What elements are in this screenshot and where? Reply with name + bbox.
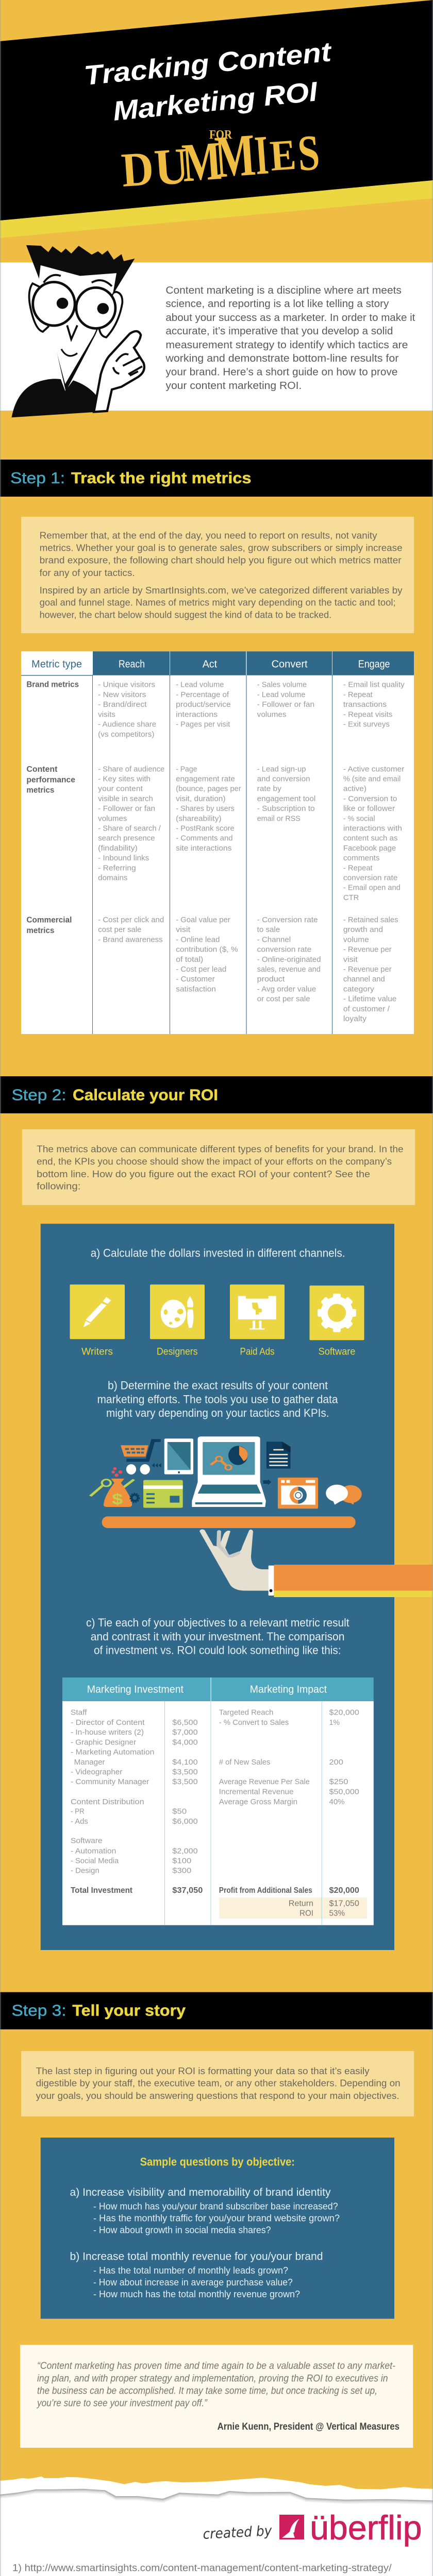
engage column: content such as [343, 834, 397, 843]
act column: site interactions [176, 844, 231, 853]
reach column: your content [98, 785, 143, 793]
channel icons [70, 1284, 364, 1357]
reach column: - Follower or fan [98, 804, 155, 813]
reach column: - Cost per click and [98, 916, 164, 924]
objective b: - How about increase in average purchase value? [93, 2277, 293, 2287]
row labels: metrics [26, 926, 54, 935]
intro text: science, and reporting is a lot like telling a story [165, 298, 389, 310]
act column: engagement rate [176, 775, 235, 783]
objective a: - Has the monthly traffic for you/your brand website grown? [93, 2213, 340, 2223]
investment amounts: $4,100 [172, 1758, 198, 1767]
quote text: you’re sure to see your investment pay off.” [36, 2398, 208, 2409]
objective b: b) Increase total monthly revenue for you/your brand [70, 2250, 323, 2262]
convert column: - Sales volume [257, 681, 307, 689]
text: part c: c) Tie each of your objectives to a relevant metric result [86, 1616, 349, 1629]
engage column: - Retained sales [343, 916, 398, 924]
small gear [130, 1493, 139, 1502]
torn white edge [0, 2477, 433, 2514]
panel: sample questions [41, 2138, 394, 2319]
convert column: email or RSS [257, 814, 301, 823]
engage column: channel and [343, 975, 385, 984]
step 3 paragraph: digestible by your staff, the executive team, or any other stakeholders. Depending on [36, 2078, 401, 2089]
row labels: Commercial [26, 916, 72, 924]
convert column: - Follower or fan [257, 700, 314, 709]
investment items: - PR [71, 1807, 85, 1816]
panel: intro [0, 245, 433, 417]
engage column: % (site and email [343, 775, 401, 783]
reach column [98, 681, 164, 944]
panel: step 2 text [22, 1129, 415, 1205]
table header row: Reach [119, 659, 145, 670]
step 2 bar [0, 1076, 433, 1113]
reach column: - Key sites with [98, 775, 151, 783]
icon: paid ads: Paid Ads [240, 1346, 274, 1357]
reach column: - Brand awareness [98, 935, 163, 944]
table header row: Metric type [31, 659, 82, 670]
impact values [329, 1708, 359, 1918]
objective b [70, 2250, 323, 2299]
step 2 paragraph [37, 1144, 404, 1192]
investment items: - Director of Content [71, 1718, 145, 1727]
text: part c: and contrast it with your investment. The comparison [91, 1630, 344, 1643]
investment items: - Marketing Automation [71, 1748, 154, 1757]
impact items [219, 1708, 313, 1918]
engage column: - Exit surveys [343, 720, 390, 729]
text: part b: b) Determine the exact results of your content [108, 1379, 328, 1392]
engage column: interactions with [343, 824, 402, 833]
step 2 title: Calculate your ROI [73, 1086, 218, 1104]
table header row: Act [203, 659, 218, 670]
panel: step 3 text [21, 2051, 414, 2116]
convert column: and conversion [257, 775, 310, 783]
step 2 label: Step 2: [11, 1086, 66, 1104]
step 3 paragraph: The last step in figuring out your ROI is formatting your data so that it’s easily [36, 2066, 370, 2076]
heading: step 2 [0, 1076, 433, 1113]
quote box [20, 2345, 413, 2448]
impact values: 40% [329, 1798, 344, 1806]
pale box [21, 517, 414, 633]
impact items: Return [289, 1899, 313, 1908]
convert column: or cost per sale [257, 995, 310, 1004]
row labels: metrics [26, 786, 54, 794]
title [82, 37, 334, 127]
investment items: - In-house writers (2) [71, 1728, 144, 1737]
tray [102, 1516, 356, 1528]
convert column [257, 681, 321, 1004]
for dummies logotype: M [180, 130, 223, 193]
pale box [21, 2051, 414, 2116]
text: part b: might vary depending on your tactics and KPIs. [106, 1406, 329, 1419]
act column: visit, duration) [176, 794, 226, 803]
intro text: Content marketing is a discipline where art meets [165, 285, 402, 296]
convert column: product [257, 975, 285, 984]
reach column: - Unique visitors [98, 681, 155, 689]
step 1 paragraphs: Inspired by an article by SmartInsights.com, we’ve categorized different variables by [40, 585, 403, 596]
convert column: to sale [257, 925, 280, 934]
engage column: conversion rate [343, 874, 397, 882]
document [267, 1442, 291, 1469]
panel: step 1 text [21, 517, 414, 633]
convert column: - Conversion rate [257, 916, 318, 924]
engage column: - Email list quality [343, 681, 405, 689]
card [143, 1480, 183, 1508]
table background [21, 651, 414, 1034]
reach column: visits [98, 710, 115, 719]
pale box [22, 1129, 415, 1205]
return highlight [219, 1897, 367, 1919]
convert column: - Online-originated [257, 955, 321, 964]
engage column: - Email open and [343, 884, 401, 892]
act column: (shareability) [176, 814, 222, 823]
engage column: - Revenue per [343, 965, 392, 974]
row labels: performance [26, 776, 75, 785]
torn shadow [0, 2489, 433, 2504]
act column: of total) [176, 955, 203, 964]
impact values: 53% [329, 1909, 345, 1918]
shopping cart [121, 1439, 161, 1462]
act column: - Cost per lead [176, 965, 226, 974]
for dummies logotype: U [153, 137, 190, 196]
references: 1) http://www.smartinsights.com/content-management/content-marketing-strategy/ [12, 2563, 392, 2574]
intro text: accurate, it’s imperative that you develop a solid [165, 326, 393, 337]
investment amounts: $2,000 [172, 1846, 198, 1855]
speech bubbles [326, 1485, 362, 1505]
icon: dummies man [11, 245, 144, 417]
impact values: 200 [329, 1758, 343, 1767]
intro text: your content marketing ROI. [165, 380, 302, 392]
impact values: $20,000 [329, 1886, 359, 1895]
reach column: visible in search [98, 794, 153, 803]
impact values: $250 [329, 1777, 348, 1786]
investment items: Manager [74, 1758, 105, 1767]
convert column: - Subscription to [257, 804, 315, 813]
investment amounts: $3,500 [172, 1768, 198, 1776]
engage column: transactions [343, 700, 387, 709]
for dummies logotype: M [213, 122, 258, 191]
impact items: Average Gross Margin [219, 1798, 297, 1806]
investment amounts: $6,500 [172, 1718, 198, 1727]
engage column: - Repeat [343, 690, 373, 699]
investment items: - Design [71, 1867, 99, 1875]
convert column: engagement tool [257, 794, 315, 803]
investment amounts: $7,000 [172, 1728, 198, 1737]
engage column: like or follower [343, 804, 395, 813]
engage column: - Active customer [343, 765, 404, 773]
uberflip wordmark: überflip [310, 2509, 422, 2547]
impact items: Targeted Reach [219, 1708, 273, 1717]
engage column: CTR [343, 893, 359, 902]
icon: software [309, 1285, 364, 1357]
heading: step 1 [0, 460, 433, 497]
engage column: - Repeat [343, 863, 373, 872]
investment items: Software [71, 1837, 103, 1845]
act column: - Online lead [176, 935, 220, 944]
table header: Marketing Investment [87, 1684, 184, 1696]
investment items: - Social Media [71, 1857, 119, 1866]
impact items: Average Revenue Per Sale [219, 1777, 310, 1786]
impact items: - % Convert to Sales [219, 1718, 289, 1727]
act column: - Page [176, 765, 197, 773]
investment items: - Community Manager [71, 1777, 149, 1786]
text: part b [97, 1379, 338, 1419]
investment amounts: $100 [172, 1857, 191, 1866]
engage column: Facebook page [343, 844, 396, 853]
row labels: Content [26, 765, 58, 774]
title: Tracking Content [82, 37, 334, 91]
icon: writers: Writers [81, 1346, 113, 1357]
step 1 paragraphs [40, 531, 403, 620]
reach column: (findability) [98, 844, 138, 853]
step 1 paragraphs: goal and funnel stage. Names of metrics might vary depending on the tactic and tool; [40, 598, 396, 608]
investment amounts: $4,000 [172, 1738, 198, 1747]
table header: Marketing Impact [250, 1684, 327, 1696]
engage column: visit [343, 955, 358, 964]
hand holding tray [199, 1529, 269, 1591]
investment items: - Ads [71, 1817, 88, 1826]
reach column: - Brand/direct [98, 700, 147, 709]
investment amounts: $37,050 [172, 1886, 203, 1895]
convert column: - Channel [257, 935, 291, 944]
blue panel [41, 1224, 394, 1950]
icon: paid ads [230, 1284, 285, 1357]
investment items: Content Distribution [71, 1798, 144, 1806]
credit: created by uberflip [203, 2509, 422, 2547]
window gear [290, 1487, 307, 1504]
step 1 paragraphs: brand exposure, the following chart should help you figure out which metrics matter [40, 555, 402, 566]
intro text: working and demonstrate bottom-line results for [165, 353, 399, 364]
engage column: of customer / [343, 1005, 390, 1013]
step 1 paragraphs: metrics. Whether your goal is to generate sales, grow subscribers or simply increase [40, 543, 403, 553]
objective a [70, 2187, 340, 2235]
title: Marketing ROI [111, 76, 320, 127]
monitor with charts [192, 1436, 266, 1507]
step 1 bar [0, 460, 433, 497]
table header row [21, 651, 414, 676]
reach column: - Referring [98, 863, 136, 872]
for dummies logotype [120, 122, 321, 197]
sample heading: Sample questions by objective: [140, 2156, 295, 2168]
row labels: Brand metrics [26, 681, 79, 689]
header banner [0, 0, 433, 238]
yellow stripe [0, 180, 433, 238]
investment items: - Automation [71, 1846, 116, 1855]
step 1 paragraphs: for any of your tactics. [40, 568, 135, 578]
text: part c [86, 1616, 349, 1657]
investment items: - Videographer [71, 1768, 122, 1776]
reach column: (vs competitors) [98, 730, 155, 739]
investment items: Total Investment [71, 1886, 133, 1895]
objective b: - How much has the total monthly revenue grown? [93, 2289, 300, 2299]
text: part b: marketing efforts. The tools you use to gather data [97, 1393, 338, 1405]
icon: software: Software [319, 1346, 355, 1357]
act column: - PostRank score [176, 824, 235, 833]
impact items: Incremental Revenue [219, 1788, 294, 1796]
intro text: about your success as a marketer. In order to make it [165, 312, 415, 324]
engage column: - Revenue per [343, 945, 392, 954]
text: part a: a) Calculate the dollars invested in different channels. [91, 1246, 345, 1259]
quote text: ing plan, and with proper strategy and implementation, proving the ROI to executives in [37, 2374, 388, 2384]
act column: - Percentage of [176, 690, 229, 699]
step 3 title: Tell your story [72, 2001, 186, 2019]
impact values: $20,000 [329, 1708, 359, 1717]
investment amounts: $6,000 [172, 1817, 198, 1826]
step 2 paragraph: The metrics above can communicate different types of benefits for your brand. In the [37, 1144, 404, 1155]
act column: visit [176, 925, 191, 934]
created by: created by [203, 2523, 273, 2543]
step 1 paragraphs: however, the chart below should suggest the kind of data to be tracked. [40, 610, 331, 620]
engage column: active) [343, 785, 367, 793]
convert column: - Lead volume [257, 690, 305, 699]
step 3 bar [0, 1992, 433, 2029]
impact items: # of New Sales [219, 1758, 270, 1767]
engage column: - % social [343, 814, 375, 823]
act column: - Customer [176, 975, 215, 984]
reach column: search presence [98, 834, 155, 843]
act column: contribution ($, % [176, 945, 238, 954]
engage column: - Lifetime value [343, 995, 396, 1004]
for dummies logotype: E [269, 131, 297, 180]
icon: uberflip logo mark [279, 2515, 304, 2539]
metrics table [21, 651, 414, 1034]
engage column: - Repeat visits [343, 710, 392, 719]
quote text: the business can be accomplished. It may take some time, but once tracking is set up, [37, 2386, 377, 2397]
objective a: - How about growth in social media shares? [93, 2225, 271, 2235]
objective a: a) Increase visibility and memorability of brand identity [70, 2187, 331, 2198]
act column: product/service [176, 700, 231, 709]
objective a: - How much has you/your brand subscriber base increased? [93, 2201, 338, 2212]
convert column: - Lead sign-up [257, 765, 306, 773]
reach column: - Share of search / [98, 824, 161, 833]
intro white panel [0, 263, 433, 411]
impact items: Profit from Additional Sales [219, 1886, 312, 1895]
reach column: - Audience share [98, 720, 156, 729]
for dummies logotype: S [296, 125, 321, 182]
icon: designers [150, 1284, 205, 1357]
arrow [263, 1479, 271, 1485]
for dummies logotype: D [120, 142, 155, 197]
step 1 title: Track the right metrics [71, 469, 252, 487]
investment amounts: $300 [172, 1867, 191, 1875]
investment amounts [172, 1718, 203, 1895]
step 1 paragraphs: Remember that, at the end of the day, you need to report on results, not vanity [40, 531, 377, 541]
step 3 paragraph [36, 2066, 401, 2101]
objective b: - Has the total number of monthly leads grown? [93, 2265, 288, 2276]
convert column: - Avg order value [257, 985, 316, 993]
panel: calculate roi [41, 1224, 433, 1950]
investment vs roi table [62, 1677, 374, 1925]
for dummies logotype: I [253, 124, 271, 187]
money bag with chart [90, 1479, 134, 1508]
investment items [71, 1708, 154, 1895]
quote text: “Content marketing has proven time and time again to be a valuable asset to any market- [37, 2361, 395, 2371]
icon: writers [70, 1284, 125, 1357]
convert column: sales, revenue and [257, 965, 321, 974]
act column: satisfaction [176, 985, 216, 993]
impact values: 1% [329, 1718, 340, 1727]
black banner band [0, 0, 433, 221]
investment items: - Graphic Designer [71, 1738, 136, 1747]
illustration: tools on tray [90, 1436, 433, 1597]
text: part c: of investment vs. ROI could look something like this: [94, 1644, 341, 1657]
impact values: $17,050 [329, 1899, 359, 1908]
table header row: Engage [358, 659, 390, 670]
torn paper footer [0, 2477, 433, 2514]
convert column: rate by [257, 785, 281, 793]
step 2 paragraph: bottom line. How do you figure out the exact ROI of your content? See the [37, 1169, 370, 1179]
reach column: cost per sale [98, 925, 141, 934]
engage column: volume [343, 935, 369, 944]
act column: - Pages per visit [176, 720, 230, 729]
panel: quote [20, 2345, 413, 2448]
step 2 paragraph: following: [37, 1181, 80, 1192]
act column: - Goal value per [176, 916, 230, 924]
act column: - Lead volume [176, 681, 224, 689]
row labels [26, 681, 79, 935]
reach column: volumes [98, 814, 127, 823]
step 3 label: Step 3: [11, 2001, 66, 2019]
reach column: domains [98, 874, 128, 882]
act column: interactions [176, 710, 218, 719]
table header row: Convert [272, 659, 308, 670]
act column: - Shares by users [176, 804, 235, 813]
engage column [343, 681, 405, 1023]
for dummies logotype: FOR [209, 128, 232, 142]
engage column: - Conversion to [343, 794, 397, 803]
investment items: Staff [71, 1708, 87, 1717]
convert column: conversion rate [257, 945, 311, 954]
quote text [36, 2361, 395, 2409]
engage column: comments [343, 854, 380, 862]
intro text [165, 285, 415, 392]
coins and arrows [111, 1463, 161, 1477]
step 2 paragraph: end, the KPIs you choose should show the impact of your efforts on the company’s [37, 1157, 392, 1167]
tablet [164, 1438, 193, 1475]
reach column: - New visitors [98, 690, 146, 699]
browser window [278, 1478, 318, 1509]
intro text: your brand. Here’s a short guide on how to prove [165, 367, 397, 378]
impact items: ROI [299, 1909, 313, 1918]
reach column: - Share of audience [98, 765, 164, 773]
engage column: loyalty [343, 1014, 367, 1023]
reach column: - Inbound links [98, 854, 149, 862]
engage column: category [343, 985, 374, 993]
engage column: growth and [343, 925, 383, 934]
step 3 paragraph: your goals, you should be answering questions that respond to your main objectives. [36, 2091, 399, 2101]
table header [62, 1677, 374, 1701]
step 1 label: Step 1: [10, 469, 65, 487]
heading: step 3 [0, 1992, 433, 2029]
investment amounts: $3,500 [172, 1777, 198, 1786]
investment amounts: $50 [172, 1807, 187, 1816]
impact values: $50,000 [329, 1788, 359, 1796]
act column [176, 681, 241, 993]
act column: - Comments and [176, 834, 233, 843]
sleeve and cuff [269, 1565, 433, 1597]
convert column: volumes [257, 710, 287, 719]
act column: (bounce, pages per [176, 785, 241, 793]
money bag with chart: $ [112, 1491, 123, 1508]
intro text: measurement strategy to identify which tactics are [165, 340, 408, 351]
icon: designers: Designers [157, 1346, 198, 1357]
quote author: Arnie Kuenn, President @ Vertical Measures [218, 2421, 399, 2432]
blue panel [41, 2138, 394, 2319]
